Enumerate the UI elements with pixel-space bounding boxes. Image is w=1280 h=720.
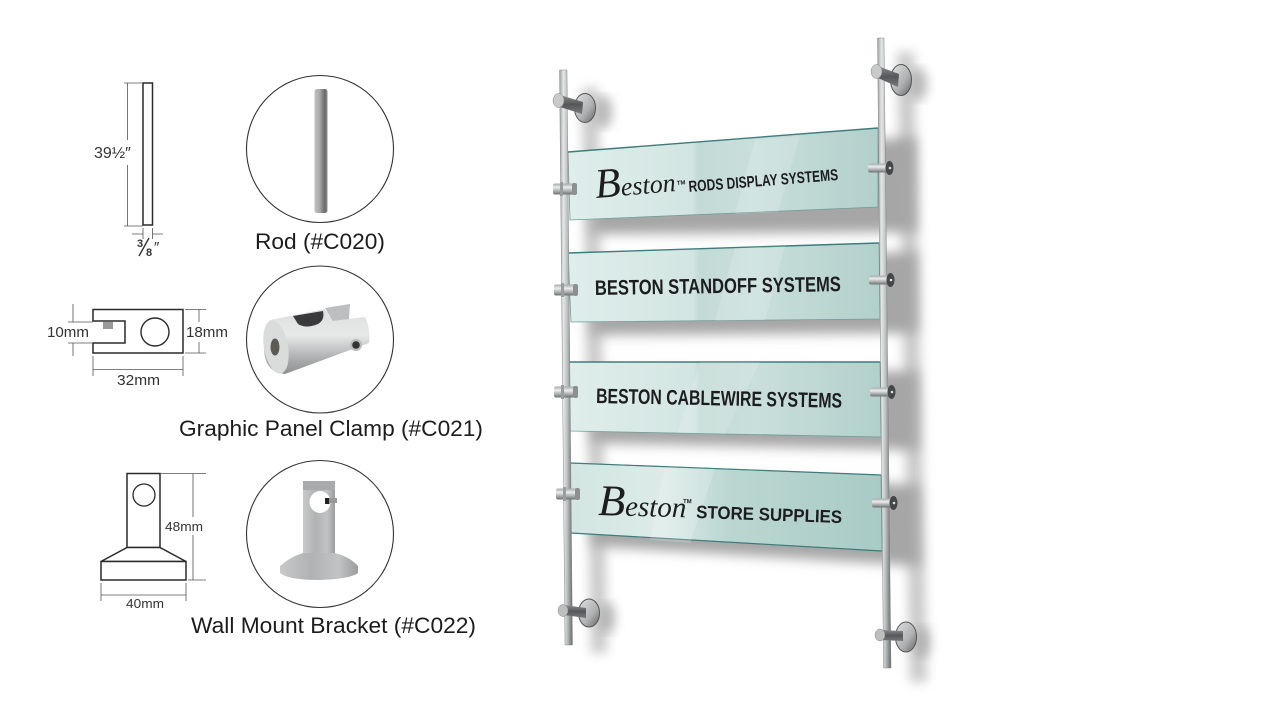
panel 1 trademark: TM — [677, 180, 686, 187]
bracket dimension drawing: 48mm — [165, 519, 203, 534]
panel 1 logo: Beston — [593, 155, 677, 208]
clamp photo in circle — [246, 266, 394, 413]
fraction three eighths: ″ — [154, 239, 160, 256]
label: rod: Rod (#C020) — [255, 229, 385, 254]
label: clamp: Graphic Panel Clamp (#C021) — [179, 416, 483, 441]
panel 4 trademark: TM — [683, 499, 692, 505]
right rod — [878, 38, 891, 668]
left panel clamps — [553, 182, 580, 501]
clamp dimension drawing — [47, 304, 228, 389]
panel 3 text: BESTON CABLEWIRE SYSTEMS — [596, 385, 842, 413]
clamp dimension drawing: 10mm — [47, 324, 89, 341]
rod dimension drawing — [94, 83, 163, 259]
bracket dimension drawing — [101, 474, 206, 611]
wall mount: bottom right — [875, 622, 916, 652]
panel 4 text: STORE SUPPLIES — [696, 502, 842, 527]
rod dimension drawing: 39½″ — [94, 145, 131, 162]
bracket dimension drawing: 40mm — [126, 596, 164, 611]
left rod — [560, 70, 572, 645]
fraction three eighths: 8 — [146, 247, 152, 259]
sign panel 2 — [568, 243, 880, 322]
sign panel 1 — [568, 128, 878, 220]
sign panel 3 — [569, 362, 881, 437]
clamp dimension drawing: 32mm — [117, 372, 160, 389]
wall mount: top left — [553, 94, 596, 122]
rod photo in circle — [246, 76, 394, 222]
right panel clamps — [868, 161, 898, 510]
wall shadows — [582, 52, 930, 682]
sign panel 4 — [570, 463, 882, 551]
label: bracket: Wall Mount Bracket (#C022) — [191, 613, 476, 638]
fraction three eighths — [137, 238, 160, 259]
panel 1 text: RODS DISPLAY SYSTEMS — [688, 167, 839, 196]
wall mount: top right — [871, 64, 912, 96]
fraction three eighths: 3 — [137, 238, 143, 250]
bracket photo in circle — [246, 460, 394, 608]
clamp dimension drawing: 18mm — [186, 324, 228, 341]
panel 2 text: BESTON STANDOFF SYSTEMS — [595, 273, 841, 300]
wall mount: bottom left — [558, 599, 600, 627]
panel 4 logo: Beston — [598, 476, 687, 527]
